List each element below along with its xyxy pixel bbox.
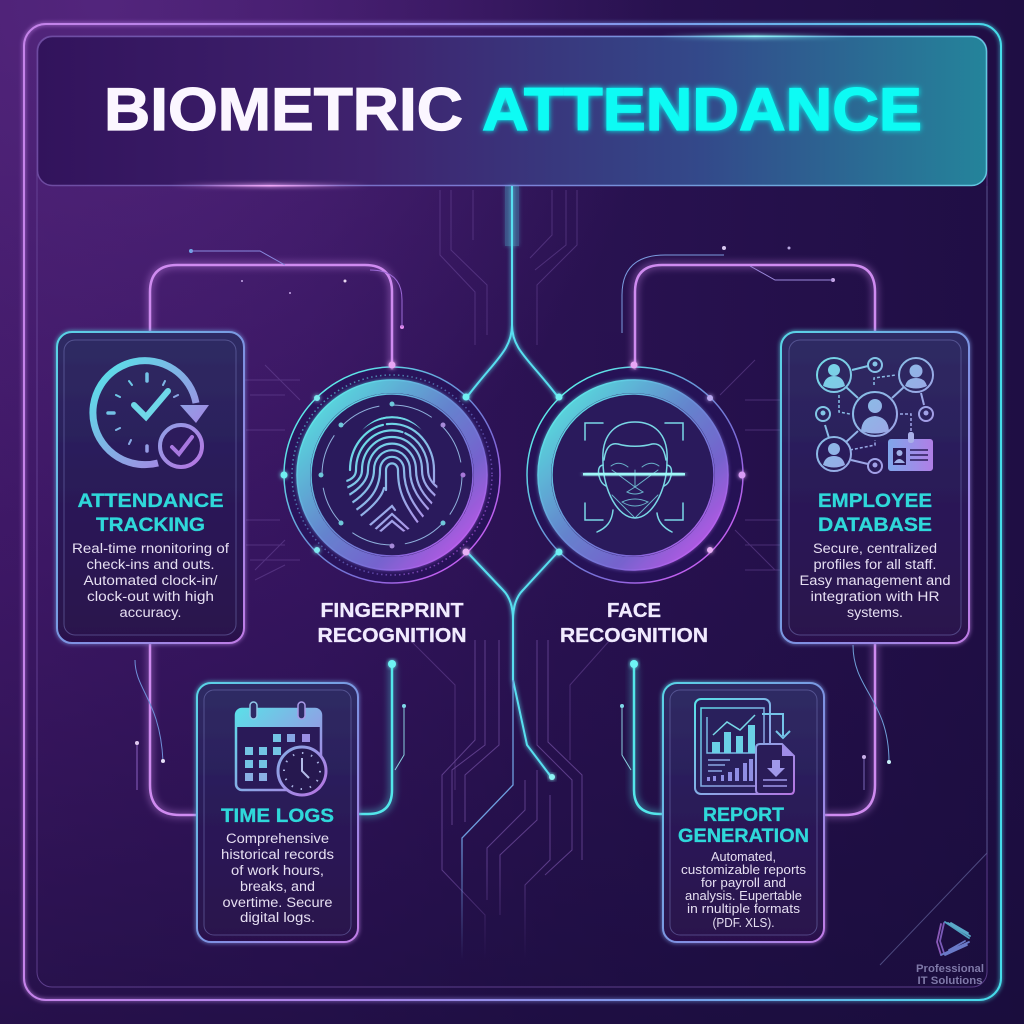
description: historical records — [221, 847, 334, 862]
nodes: fingerprint — [280, 362, 470, 556]
trunk lower branch — [462, 680, 513, 960]
label: fingerprint recognition: FINGERPRINT — [320, 600, 464, 622]
heading: DATABASE — [818, 515, 932, 536]
faint circuit traces — [245, 190, 782, 790]
connector: upper right purple — [635, 265, 875, 370]
label: face recognition: FACE — [607, 600, 661, 622]
heading — [818, 491, 932, 536]
heading: TRACKING — [96, 515, 205, 536]
label: fingerprint recognition — [318, 600, 466, 647]
description: breaks, and — [240, 879, 315, 894]
description: customizable reports — [681, 863, 806, 877]
nodes: face — [556, 362, 746, 556]
heading — [78, 491, 224, 536]
description: of work hours, — [231, 863, 324, 878]
description: Real-time rnonitoring of — [72, 541, 229, 556]
connector: upper left purple — [150, 265, 392, 370]
title: ATTENDANCE — [482, 76, 922, 143]
description: systems. — [847, 605, 903, 620]
description: check-ins and outs. — [86, 557, 214, 572]
panel: employee database — [781, 332, 969, 643]
description: for payroll and — [701, 876, 786, 890]
label: face recognition — [560, 600, 708, 647]
panel: attendance tracking — [57, 332, 244, 643]
description: Secure, centralized — [813, 541, 937, 556]
connector nodes and thin flourishes — [135, 246, 891, 790]
logo: professional it solutions — [916, 922, 984, 987]
description — [681, 850, 806, 930]
heading — [678, 805, 809, 847]
heading: ATTENDANCE — [78, 491, 224, 512]
fingerprint ring dots — [318, 402, 466, 548]
connector: lower right purple — [824, 643, 875, 815]
panel: face recognition — [527, 367, 743, 583]
heading: GENERATION — [678, 826, 809, 847]
icon: report tablet and document — [695, 699, 794, 794]
description — [72, 541, 229, 620]
description: Easy management and — [800, 573, 950, 588]
icon: triangle mark — [937, 922, 970, 955]
panel: fingerprint recognition — [284, 367, 500, 583]
icon: face scan — [585, 422, 683, 532]
connector: lower left purple — [150, 643, 197, 815]
description: Comprehensive — [226, 831, 329, 846]
icon: id card — [888, 432, 933, 471]
description: integration with HR — [810, 589, 940, 604]
description: Automated clock-in/ — [84, 573, 218, 588]
scan line — [583, 473, 685, 476]
description: analysis. Eupertable — [685, 889, 802, 903]
description: digital logs. — [240, 910, 315, 925]
heading: TIME LOGS — [221, 806, 334, 827]
description — [800, 541, 950, 620]
heading: REPORT — [703, 805, 784, 826]
trunk glow — [505, 186, 519, 246]
title: BIOMETRIC — [104, 76, 463, 143]
description: in rnultiple formats — [687, 902, 800, 916]
label: fingerprint recognition: RECOGNITION — [318, 625, 466, 647]
accent glows on title panel — [170, 35, 850, 187]
logo: professional it solutions: Professional — [916, 963, 984, 975]
label: face recognition: RECOGNITION — [560, 625, 708, 647]
description: clock-out with high — [87, 589, 214, 604]
description: Automated, — [711, 850, 776, 864]
panel: report generation — [663, 683, 824, 942]
description: (PDF. XLS). — [712, 916, 774, 930]
panel: time logs — [197, 683, 358, 942]
icon: calendar with clock — [236, 702, 326, 795]
description: overtime. Secure — [222, 895, 332, 910]
connector: report cyan — [634, 664, 663, 814]
connector: time logs cyan — [358, 664, 392, 814]
icon: fingerprint — [346, 416, 438, 532]
description — [221, 831, 334, 925]
icon: employee network — [816, 358, 933, 473]
title — [104, 76, 922, 143]
lower central circuit traces — [442, 640, 582, 960]
icon: clock with check — [93, 361, 209, 467]
description: accuracy. — [120, 605, 182, 620]
description: profiles for all staff. — [814, 557, 936, 572]
title panel — [38, 36, 986, 186]
horizontal links — [244, 474, 781, 476]
central data trunk — [467, 186, 558, 778]
logo: professional it solutions: IT Solutions — [918, 975, 982, 987]
heading: EMPLOYEE — [818, 491, 932, 512]
